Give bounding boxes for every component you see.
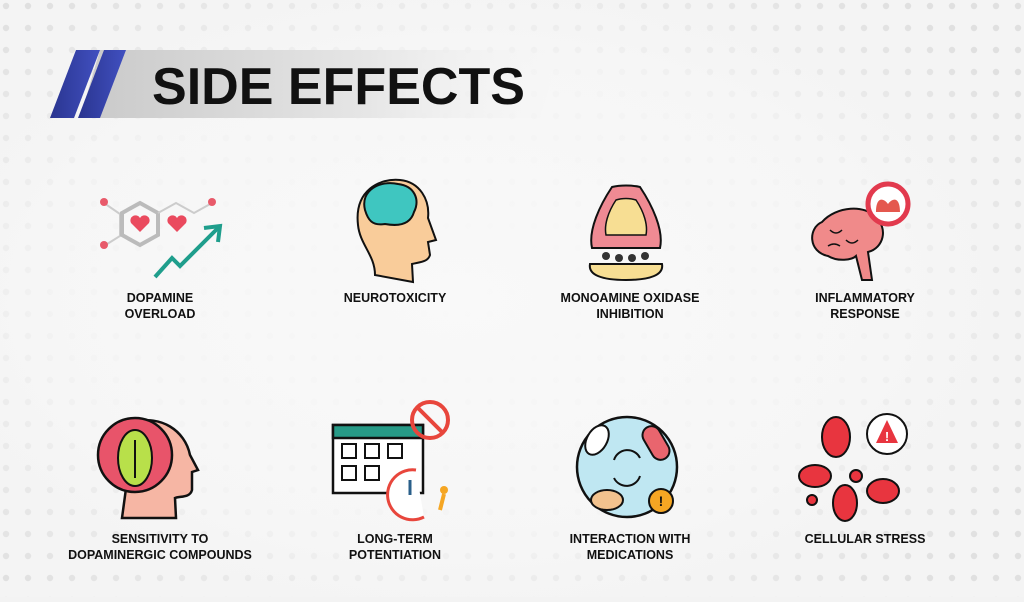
icon: cellular stress	[799, 414, 907, 521]
icon: sensitivity	[98, 418, 198, 518]
icon: cellular stress: !	[885, 429, 889, 444]
label: monoamine oxidase inhibition: MONOAMINE OXIDASE	[561, 291, 699, 305]
icon: long-term potentiation	[333, 402, 448, 520]
icon: neurotoxicity	[358, 180, 436, 282]
label: interaction with medications: INTERACTION WITH	[570, 532, 690, 546]
icon: inflammatory response	[812, 184, 908, 280]
label: long-term potentiation: LONG-TERM	[357, 532, 433, 546]
icon: monoamine oxidase inhibition	[590, 186, 662, 280]
label: sensitivity: DOPAMINERGIC COMPOUNDS	[68, 548, 252, 562]
label: long-term potentiation: POTENTIATION	[349, 548, 441, 562]
label: dopamine overload: OVERLOAD	[125, 307, 195, 321]
label: neurotoxicity: NEUROTOXICITY	[344, 291, 447, 305]
label: sensitivity: SENSITIVITY TO	[112, 532, 208, 546]
title: SIDE EFFECTS	[152, 58, 525, 116]
label: inflammatory response: RESPONSE	[830, 307, 900, 321]
icon: interaction with medications	[577, 417, 677, 517]
icon: dopamine overload	[100, 198, 220, 277]
label: cellular stress: CELLULAR STRESS	[805, 532, 925, 546]
label: inflammatory response: INFLAMMATORY	[815, 291, 915, 305]
label: interaction with medications: MEDICATIONS	[587, 548, 673, 562]
title	[50, 50, 560, 118]
label: monoamine oxidase inhibition: INHIBITION	[596, 307, 664, 321]
label: dopamine overload: DOPAMINE	[127, 291, 193, 305]
icon: interaction with medications: !	[659, 493, 663, 509]
